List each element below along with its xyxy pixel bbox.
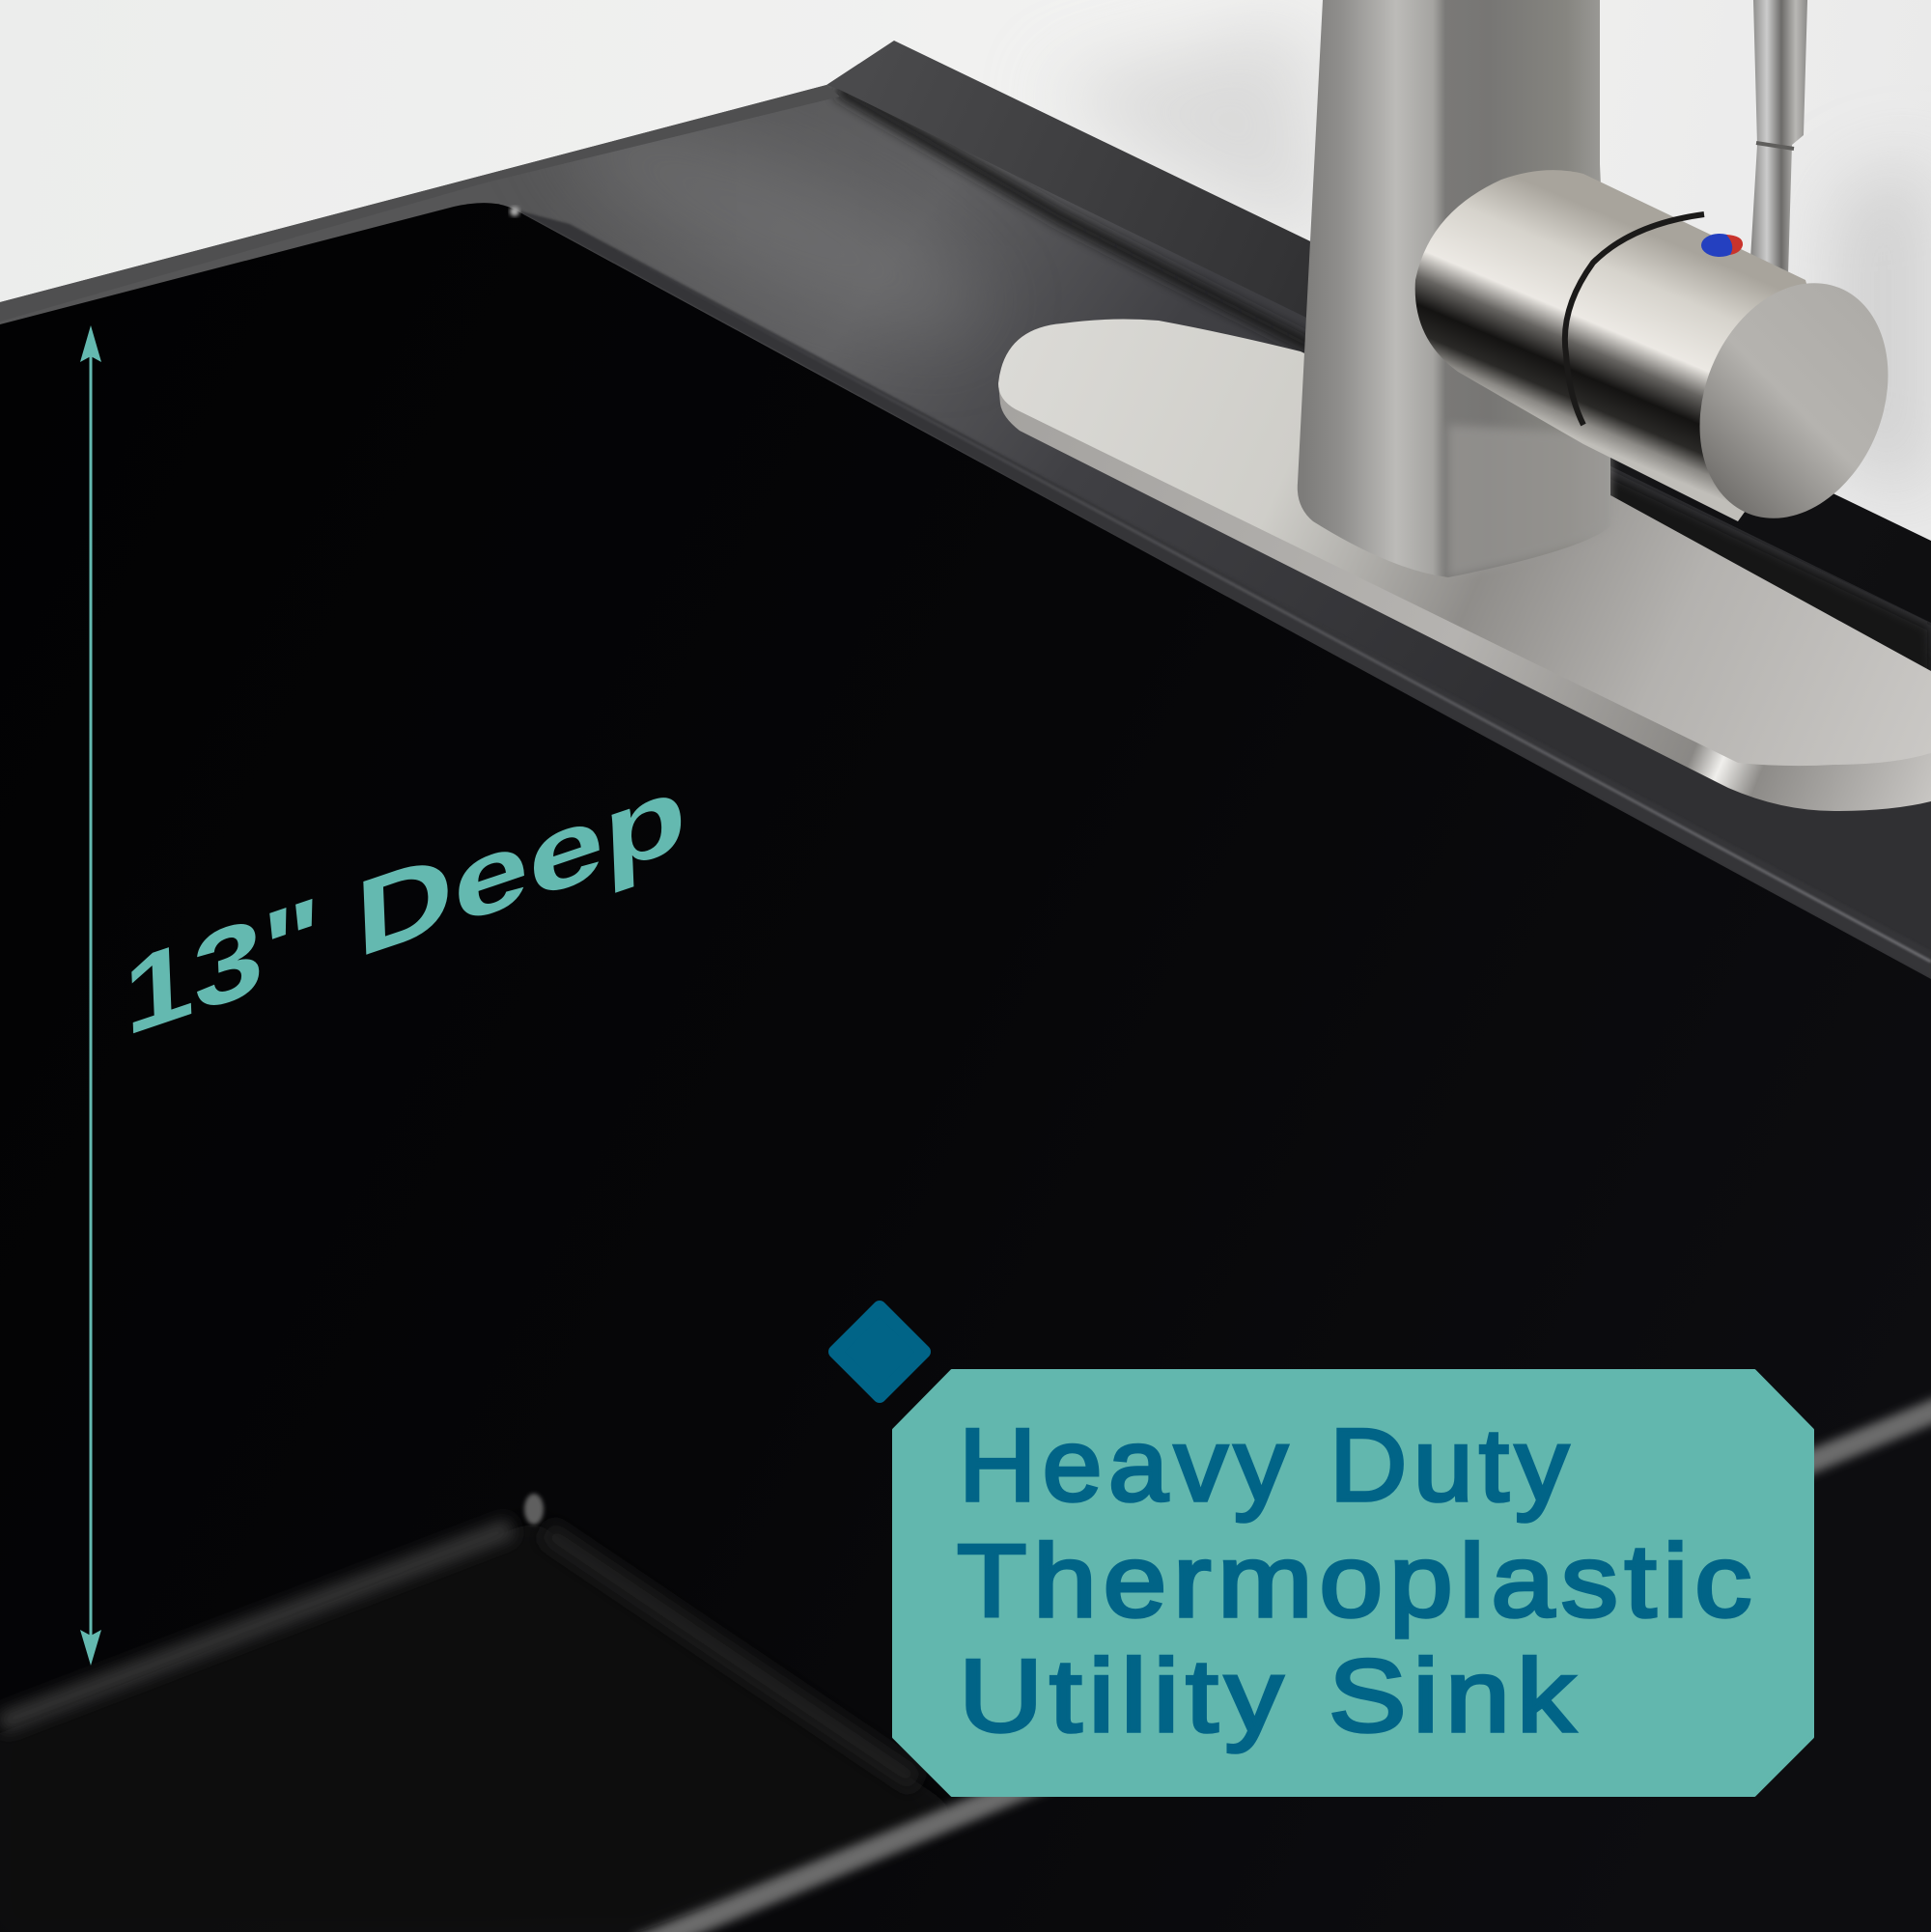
background wall [0,0,1931,676]
callout panel [894,1371,1812,1795]
callout title [957,1407,1758,1753]
back rim band [0,85,840,322]
deck shading [538,71,1931,686]
handle cylinder [1415,170,1834,521]
faucet deck plate [998,320,1931,811]
depth label: Deep [353,750,688,980]
back lip [826,41,1931,676]
diamond marker [835,1307,924,1396]
front rim band [515,210,1931,979]
lever stem [1749,0,1807,275]
lower basin floor lines [0,1396,1931,1932]
hot and cold indicator [1701,234,1743,257]
depth arrow [80,325,101,1666]
seam ring [1565,214,1704,425]
deck surface [0,85,1931,985]
callout title: Utility Sink [959,1638,1581,1753]
depth label: 13" [122,874,324,1058]
faucet body [1298,0,1610,577]
callout title: Heavy Duty [959,1407,1575,1523]
callout title: Thermoplastic [957,1523,1758,1638]
cap face [1665,255,1922,546]
depth label [122,750,688,1058]
corner glint [510,207,519,216]
faucet handle [1415,0,1922,546]
